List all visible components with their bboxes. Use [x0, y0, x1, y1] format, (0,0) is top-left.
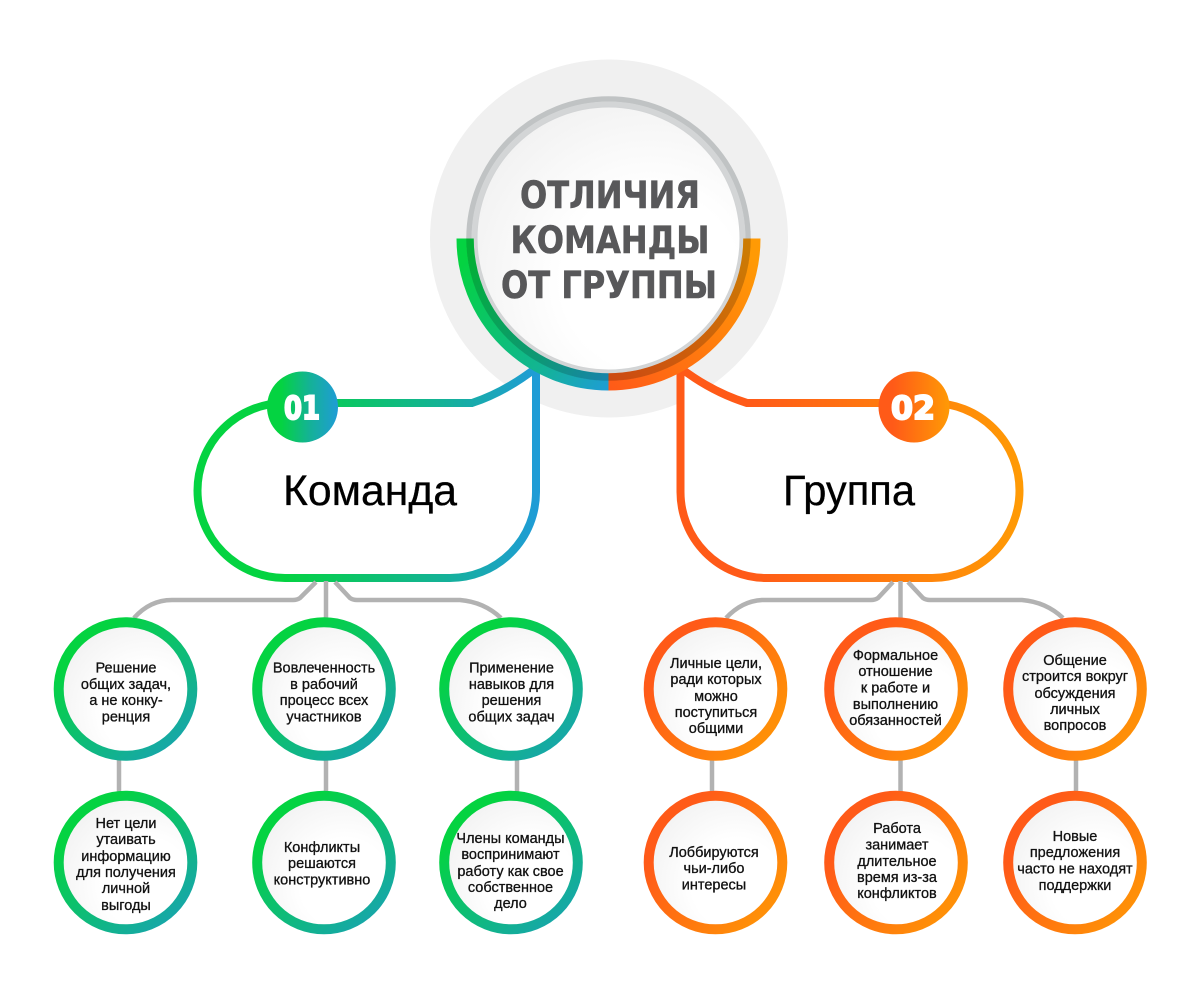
- node: Личные цели: можно: [694, 689, 738, 705]
- node: Формальное отношение: к работе и: [861, 680, 930, 696]
- node: Общение строится: [1008, 622, 1142, 756]
- node: Нет цели утаивать: [59, 796, 192, 929]
- central grey ring: [469, 99, 748, 378]
- node: Формальное отношение: [829, 622, 963, 756]
- node: Формальное отношение: выполнению: [853, 697, 938, 713]
- node: Новые предложения: поддержки: [1039, 878, 1111, 894]
- node: Работа занимает: занимает: [865, 838, 929, 854]
- node: Новые предложения: предложения: [1030, 845, 1120, 861]
- node: Применение навыков: навыков для: [469, 677, 554, 693]
- node: Личные цели: Личные цели,: [670, 656, 762, 672]
- title: [501, 174, 717, 307]
- node: Члены команды: [444, 796, 578, 929]
- node: Работа занимает: Работа: [873, 821, 922, 837]
- node: Нет цели утаивать: утаивать: [96, 832, 156, 848]
- heading: Команда: Команда: [283, 467, 457, 515]
- node: Решение общих задач: ренция: [102, 710, 150, 726]
- badge: 02: [878, 372, 950, 442]
- node: Нет цели утаивать: выгоды: [101, 898, 151, 914]
- node: Личные цели: поступиться: [675, 705, 757, 721]
- node: Личные цели: общими: [689, 721, 743, 737]
- node: Лоббируются: интересы: [682, 878, 746, 894]
- node: Работа занимает: время из-за: [857, 870, 938, 886]
- node: Вовлеченность: участников: [286, 710, 362, 726]
- node: Общение строится: обсуждения: [1034, 686, 1116, 702]
- badge: 02: 02: [891, 389, 935, 427]
- node: Члены команды: воспринимают: [461, 847, 560, 863]
- node: Члены команды: работу как свое: [457, 864, 564, 880]
- node: Конфликты: [257, 796, 391, 929]
- node: Новые предложения: Новые: [1053, 829, 1097, 845]
- node: Члены команды: собственное: [468, 880, 553, 896]
- node: Работа занимает: [829, 796, 963, 929]
- node: Общение строится: вопросов: [1044, 718, 1107, 734]
- node: Нет цели утаивать: информацию: [81, 849, 171, 865]
- node: Нет цели утаивать: личной: [102, 881, 150, 897]
- node: Новые предложения: часто не находят: [1017, 862, 1133, 878]
- central colored arcs: [462, 238, 756, 386]
- node: Личные цели: ради которых: [670, 672, 762, 688]
- node: Лоббируются: чьи-либо: [684, 861, 744, 877]
- left panel: Команда: [198, 368, 536, 578]
- right panel: Группа: [680, 368, 1020, 578]
- node: Новые предложения: [1008, 796, 1142, 929]
- node: Вовлеченность: в рабочий: [290, 677, 358, 693]
- node: Решение общих задач: [59, 622, 192, 756]
- central circle background: [430, 60, 788, 418]
- node: Формальное отношение: обязанностей: [849, 713, 942, 729]
- badge: 01: [267, 372, 338, 442]
- node: Применение навыков: общих задач: [468, 710, 555, 726]
- node: Решение общих задач: а не конку-: [89, 693, 163, 709]
- node: Общение строится: Общение: [1043, 653, 1107, 669]
- heading: Группа: Группа: [783, 467, 915, 515]
- node: Решение общих задач: Решение: [96, 660, 156, 676]
- node: Нет цели утаивать: для получения: [76, 865, 176, 881]
- node: Вовлеченность: Вовлеченность: [273, 660, 375, 676]
- node: Работа занимает: конфликтов: [857, 886, 937, 902]
- node: Лоббируются: [649, 796, 782, 929]
- title: ОТ ГРУППЫ: [501, 264, 717, 307]
- node: Общение строится: личных: [1050, 702, 1101, 718]
- central white disc: [477, 107, 740, 370]
- node: Конфликты: конструктивно: [274, 872, 370, 888]
- node: Конфликты: решаются: [288, 856, 356, 872]
- node: Вовлеченность: процесс всех: [280, 693, 369, 709]
- node: Члены команды: дело: [494, 896, 527, 912]
- title: ОТЛИЧИЯ: [520, 174, 700, 217]
- node: Работа занимает: длительное: [857, 854, 937, 870]
- node: Вовлеченность: [257, 622, 391, 756]
- node: Формальное отношение: отношение: [858, 664, 933, 680]
- grey connectors: Команда: [119, 581, 517, 795]
- node: Конфликты: Конфликты: [284, 840, 360, 856]
- node: Применение навыков: решения: [482, 693, 541, 709]
- node: Лоббируются: Лоббируются: [669, 845, 759, 861]
- title: КОМАНДЫ: [510, 219, 710, 262]
- grey connectors: Группа: [712, 581, 1076, 795]
- node: Члены команды: Члены команды: [456, 831, 565, 847]
- node: Применение навыков: [444, 622, 578, 756]
- node: Личные цели: [649, 622, 782, 756]
- node: Применение навыков: Применение: [469, 660, 554, 676]
- badge: 01: 01: [284, 389, 320, 427]
- node: Решение общих задач: общих задач,: [81, 677, 171, 693]
- node: Общение строится: строится вокруг: [1022, 669, 1128, 685]
- node: Нет цели утаивать: Нет цели: [95, 816, 157, 832]
- node: Формальное отношение: Формальное: [853, 648, 938, 664]
